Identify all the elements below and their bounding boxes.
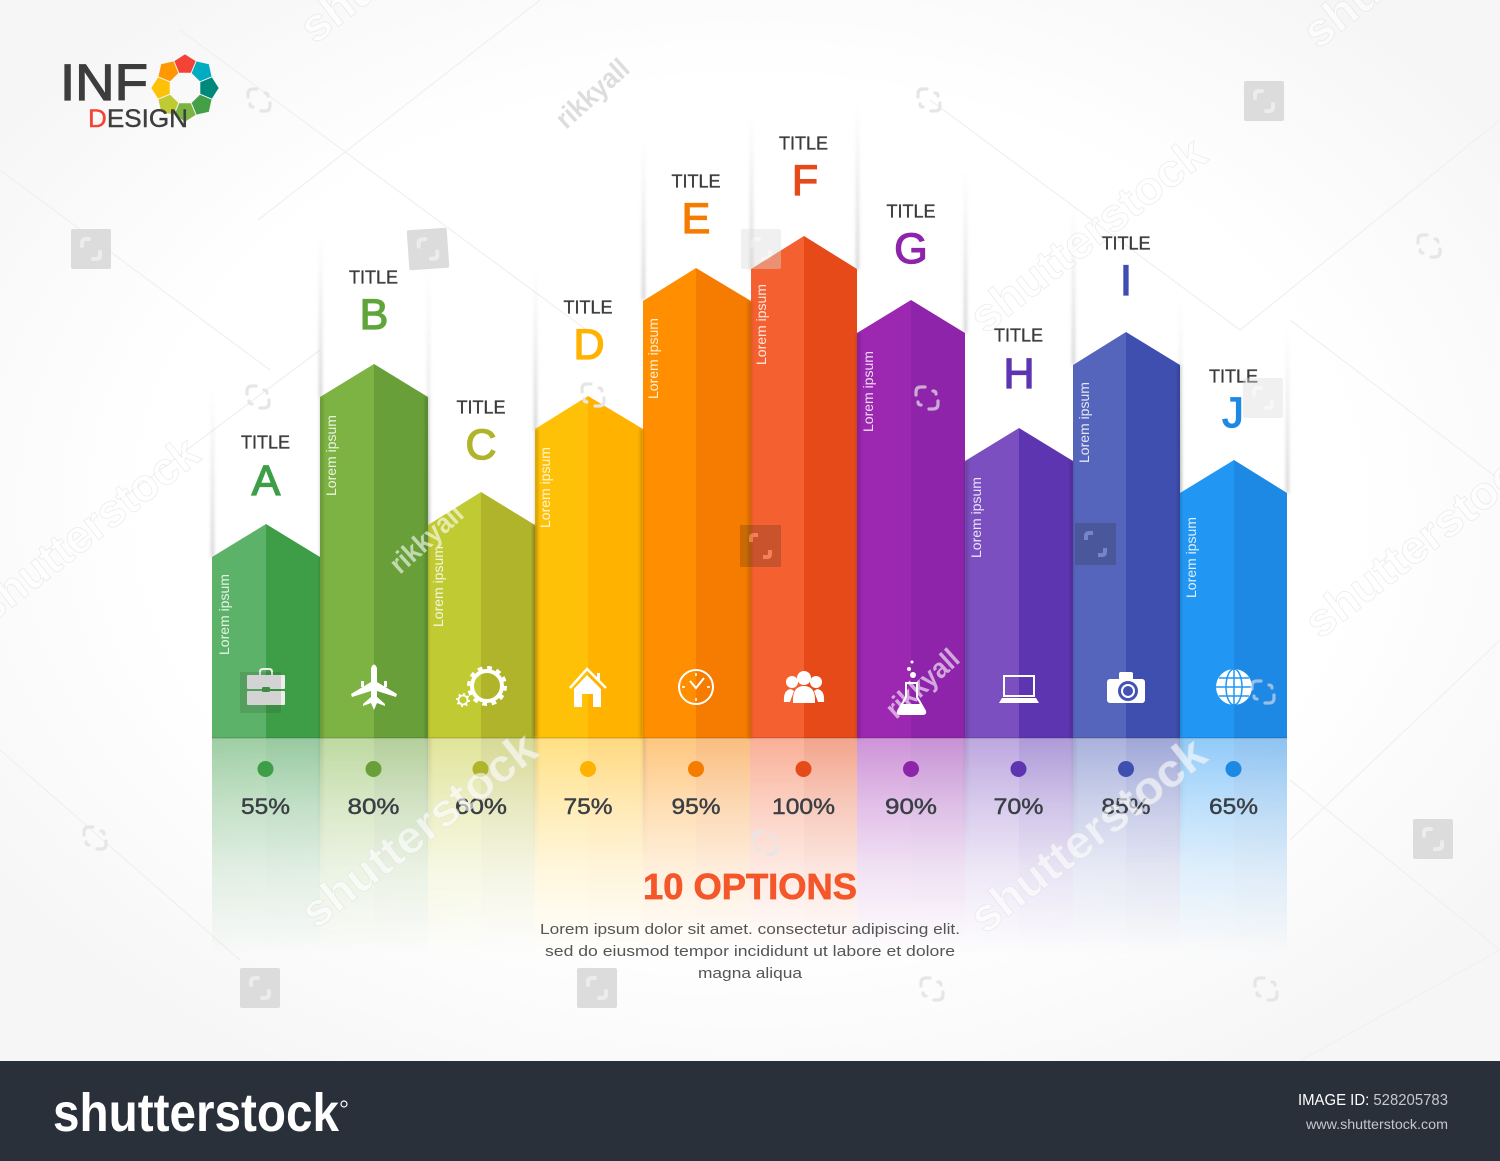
column G	[857, 202, 965, 819]
watermark text: shutterstock	[959, 126, 1216, 343]
chart: ten arrow columns	[212, 134, 1287, 819]
icon: house	[570, 669, 606, 707]
column I: TITLE	[1101, 234, 1151, 254]
column H: TITLE	[994, 326, 1043, 346]
column C: 60%	[455, 794, 507, 819]
column J: Lorem ipsum	[1183, 517, 1199, 598]
watermark text: shutterstock	[959, 726, 1216, 943]
column G: Lorem ipsum	[860, 351, 876, 432]
footer logo: shutterstock	[53, 1083, 340, 1143]
icon: airplane	[351, 664, 397, 710]
footer bar	[0, 1061, 1500, 1161]
column F: 100%	[772, 794, 835, 819]
watermark author marks: rikkyall	[879, 643, 965, 724]
column separators shadows	[320, 301, 1180, 738]
column F: TITLE	[779, 134, 828, 154]
logo wordmark INF: INF	[60, 54, 148, 111]
column B: Lorem ipsum	[323, 415, 339, 496]
column D: 75%	[564, 794, 612, 819]
column I: I	[1120, 257, 1132, 305]
column H	[965, 326, 1073, 819]
column E	[643, 172, 751, 819]
column E: TITLE	[671, 172, 721, 192]
watermark author marks: rikkyall	[383, 498, 469, 579]
icon: briefcase	[247, 669, 285, 705]
column J: 65%	[1209, 794, 1258, 819]
watermark square stamps	[71, 81, 1453, 1008]
description text block: Lorem ipsum dolor sit amet. consectetur adipiscing elit.	[540, 921, 960, 938]
watermark author marks: rikkyall	[549, 53, 635, 134]
watermark small outline stamps	[84, 89, 1440, 1000]
column C	[428, 398, 535, 819]
column F: Lorem ipsum	[753, 284, 769, 365]
heading: 10 options: 10 OPTIONS	[643, 866, 857, 907]
column E: E	[682, 195, 710, 243]
column edge shadows in reflection	[320, 738, 1182, 878]
icon: globe	[1216, 669, 1252, 705]
description text block	[540, 921, 960, 982]
description text block: sed do eiusmod tempor incididunt ut labore et dolore	[545, 943, 955, 960]
reflection under the columns	[212, 738, 1287, 934]
column B: 80%	[348, 794, 400, 819]
column D: D	[573, 321, 605, 369]
column B: TITLE	[349, 268, 398, 288]
column G: 90%	[885, 794, 937, 819]
watermark author marks	[383, 53, 965, 724]
column H: Lorem ipsum	[968, 477, 984, 558]
logo	[60, 54, 219, 133]
column A: A	[252, 457, 281, 505]
column edge shadows above bars	[211, 105, 1289, 557]
column A: TITLE	[241, 432, 290, 452]
column B	[320, 268, 428, 819]
column C: TITLE	[456, 398, 506, 418]
column G: G	[894, 225, 928, 273]
column D: TITLE	[563, 298, 613, 318]
column A: 55%	[241, 794, 290, 819]
column A: Lorem ipsum	[216, 574, 232, 655]
image id: IMAGE ID: 528205783	[1298, 1092, 1448, 1109]
icon: laptop	[999, 676, 1039, 703]
column J: J	[1222, 389, 1244, 437]
column F	[751, 134, 857, 819]
column D: Lorem ipsum	[537, 447, 553, 528]
column C: Lorem ipsum	[430, 546, 446, 627]
column F: F	[792, 157, 818, 205]
column I	[1073, 234, 1180, 819]
column G: TITLE	[886, 202, 936, 222]
registered mark	[341, 1101, 347, 1107]
site url: www.shutterstock.com	[1305, 1116, 1448, 1132]
column C: C	[465, 421, 497, 469]
column E: Lorem ipsum	[645, 318, 661, 399]
watermark text: shutterstock	[290, 721, 547, 938]
logo wordmark DESIGN: DESIGN	[88, 105, 188, 133]
column H: H	[1003, 350, 1035, 398]
icon: camera	[1107, 672, 1145, 703]
column B: B	[360, 291, 388, 339]
column J: TITLE	[1209, 366, 1258, 386]
column E: 95%	[672, 794, 720, 819]
description text block: magna aliqua	[698, 965, 803, 982]
column H: 70%	[994, 794, 1044, 819]
column I: Lorem ipsum	[1076, 382, 1092, 463]
column A	[212, 432, 320, 819]
horizontal baseline shade	[212, 737, 1287, 739]
column J	[1180, 366, 1287, 819]
column D	[535, 298, 643, 819]
icon: group of people	[784, 671, 824, 703]
column I: 85%	[1102, 794, 1150, 819]
icon: gears	[457, 668, 504, 706]
icon: clock	[679, 670, 713, 704]
icon: chemistry flask	[898, 660, 925, 714]
logo ring	[151, 54, 219, 122]
